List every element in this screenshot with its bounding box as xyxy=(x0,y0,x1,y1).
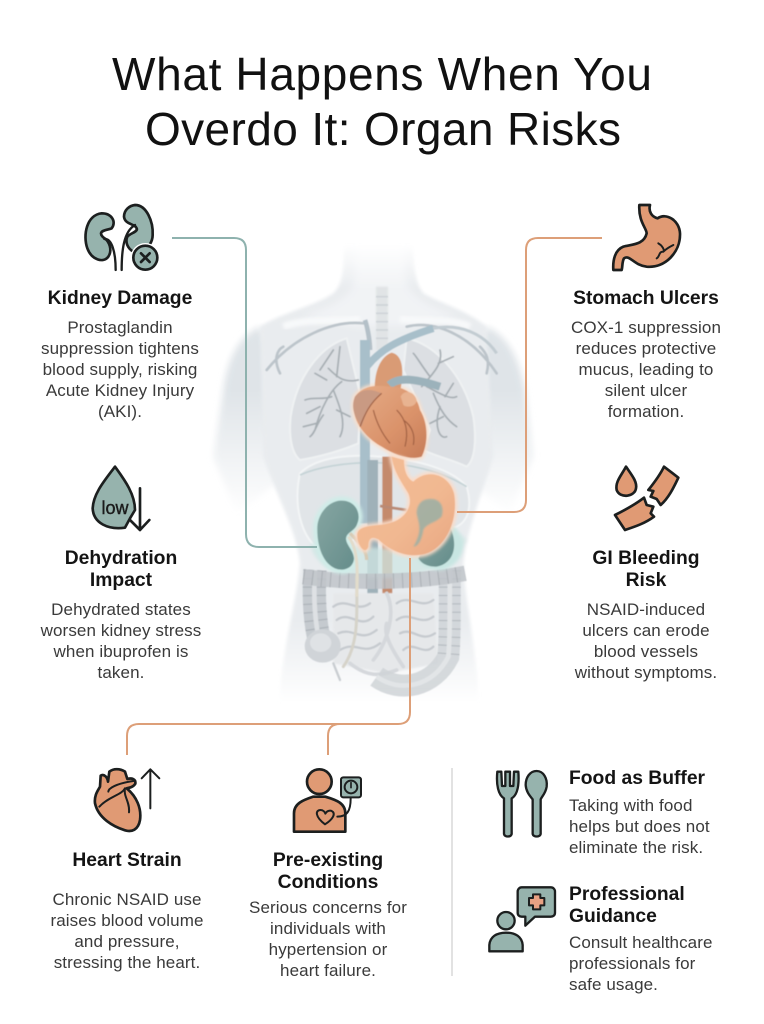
diaphragm and liver outline xyxy=(297,456,469,550)
stomach with esophagus xyxy=(357,457,455,555)
panel: food as buffer xyxy=(497,768,710,857)
intestines xyxy=(303,570,465,686)
title: What Happens When You xyxy=(112,48,652,100)
text block: Taking with food xyxy=(569,796,693,815)
text block: safe usage. xyxy=(569,975,658,994)
icon: low water drop with down arrow xyxy=(93,467,149,530)
panel: heart strain xyxy=(50,769,204,972)
text block: heart failure. xyxy=(280,961,376,980)
heading: Heart Strain xyxy=(72,850,182,871)
text block: suppression tightens xyxy=(41,339,199,358)
panel: professional guidance xyxy=(489,884,713,994)
text block: mucus, leading to xyxy=(579,360,713,379)
panel: dehydration impact xyxy=(40,467,201,682)
panel: pre-existing conditions xyxy=(249,769,407,980)
kidney on right, behind stomach xyxy=(417,523,463,570)
heading: Food as Buffer xyxy=(569,768,706,789)
text block: stressing the heart. xyxy=(54,953,200,972)
heading: Stomach Ulcers xyxy=(573,288,719,309)
text block: formation. xyxy=(608,402,684,421)
heart with aortic arch xyxy=(353,353,440,458)
text block: eliminate the risk. xyxy=(569,838,703,857)
icon: person with heart and blood pressure monitor xyxy=(294,769,361,832)
icon: low water drop with down arrow: low xyxy=(101,498,130,518)
major blood vessels xyxy=(365,320,497,593)
text block: Serious concerns for xyxy=(249,898,407,917)
icon: kidneys with x mark xyxy=(85,205,157,270)
heading: Dehydration xyxy=(65,548,177,569)
heading: Kidney Damage xyxy=(48,288,193,309)
heading: Risk xyxy=(626,570,667,591)
title: Overdo It: Organ Risks xyxy=(145,103,621,155)
text block: NSAID-induced xyxy=(587,600,705,619)
panel: GI bleeding risk xyxy=(574,467,717,682)
connector: stomach icon to stomach xyxy=(457,238,602,512)
kidney glow halo xyxy=(310,527,467,578)
heading: Guidance xyxy=(569,906,657,927)
text block: when ibuprofen is xyxy=(53,642,188,661)
arms xyxy=(214,326,533,487)
text block: Consult healthcare xyxy=(569,933,713,952)
text block: Prostaglandin xyxy=(67,318,173,337)
panel: stomach ulcers xyxy=(571,205,721,421)
kidney on left, highlighted xyxy=(317,501,367,597)
icon: heart with up arrow xyxy=(95,769,159,831)
text block: COX-1 suppression xyxy=(571,318,721,337)
text block: worsen kidney stress xyxy=(40,621,201,640)
heading: Pre-existing xyxy=(273,850,383,871)
text block: (AKI). xyxy=(98,402,142,421)
text block: without symptoms. xyxy=(574,663,717,682)
text block: blood supply, risking xyxy=(43,360,197,379)
text block: Chronic NSAID use xyxy=(52,890,202,909)
text block: silent ulcer xyxy=(605,381,687,400)
connector: stomach to heart strain and pre-existing conditions xyxy=(127,558,410,755)
heading: GI Bleeding xyxy=(592,548,700,569)
text block: reduces protective xyxy=(576,339,716,358)
heading: Conditions xyxy=(278,872,378,893)
text block: Acute Kidney Injury xyxy=(46,381,195,400)
text block: raises blood volume xyxy=(50,911,204,930)
body silhouette xyxy=(261,261,488,675)
text block: professionals for xyxy=(569,954,696,973)
panel: kidney damage xyxy=(41,205,199,421)
icon: blood drop and torn vessel xyxy=(615,467,678,530)
anatomical torso illustration xyxy=(213,243,533,713)
text block: ulcers can erode xyxy=(582,621,710,640)
icon: person with medical speech bubble xyxy=(489,887,555,951)
lungs xyxy=(267,323,497,467)
text block: and pressure, xyxy=(74,932,180,951)
text block: Dehydrated states xyxy=(51,600,191,619)
trachea xyxy=(376,287,388,350)
text block: hypertension or xyxy=(269,940,388,959)
icon: stomach with ulcer crack xyxy=(613,205,680,270)
text block: blood vessels xyxy=(594,642,698,661)
connector: kidney icon to kidney xyxy=(172,238,317,547)
heading: Professional xyxy=(569,884,685,905)
heading: Impact xyxy=(90,570,153,591)
title xyxy=(112,48,652,155)
text block: individuals with xyxy=(270,919,386,938)
text block: taken. xyxy=(98,663,144,682)
icon: fork and spoon xyxy=(497,771,547,836)
text block: helps but does not xyxy=(569,817,710,836)
